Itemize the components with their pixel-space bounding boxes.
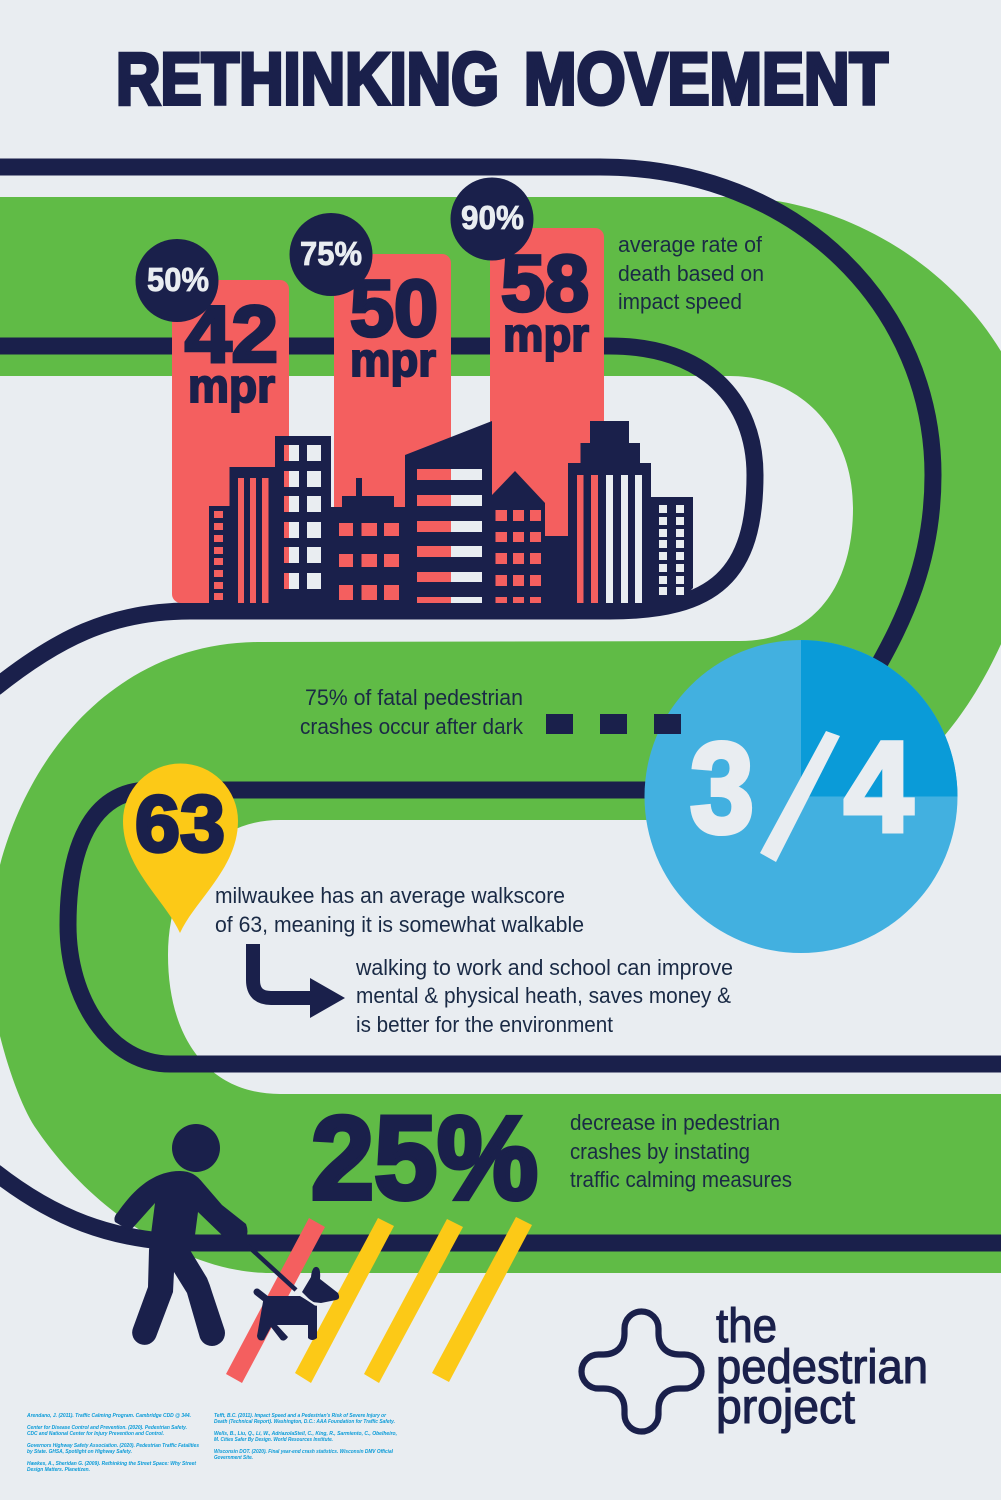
value: 50 mpr: 50 (350, 264, 438, 352)
text: milwaukee walkscore (215, 883, 584, 937)
bar: 50 mpr (334, 254, 451, 603)
text: benefits of walking: walking to work and school can improve (355, 955, 733, 980)
text: milwaukee walkscore: of 63, meaning it is somewhat walkable (215, 912, 584, 937)
title (116, 39, 888, 120)
text: traffic calming (570, 1110, 792, 1192)
green road ribbon (0, 197, 1001, 1273)
windows: building 2 (238, 478, 268, 603)
windows: building 8 (659, 505, 684, 595)
title: RETHINKING (116, 39, 499, 120)
value: 42 mpr: 42 (185, 290, 278, 378)
windows: building 5 (417, 469, 482, 603)
logo (582, 1300, 928, 1434)
navy road lines (0, 167, 1001, 1243)
value: 50 mpr: mpr (350, 333, 436, 386)
pie chart: three quarters (644, 640, 958, 953)
dashed connector (546, 714, 681, 734)
badge: 75% (290, 213, 372, 296)
bar: 58 mpr (490, 228, 604, 603)
badge: 50% (136, 239, 218, 322)
windows: building 4 (339, 523, 399, 600)
text: average rate of death (618, 232, 764, 314)
references: Death (Technical Report). Washington, D.C.: AAA Foundation for Traffic Safety. (214, 1419, 395, 1425)
references: Governors Highway Safety Association. (2020). Pedestrian Traffic Fatalities (27, 1443, 199, 1449)
references: Hawkes, A., Sheridan G. (2009). Rethinking the Street Space: Why Street (27, 1461, 196, 1467)
text: traffic calming: traffic calming measures (570, 1167, 792, 1192)
text: average rate of death: death based on (618, 261, 764, 286)
logo mark (582, 1312, 702, 1432)
person (114, 1124, 248, 1346)
references: Tefft, B.C. (2011). Impact Speed and a Pedestrian's Risk of Severe Injury or (214, 1413, 387, 1419)
references (26, 1413, 397, 1473)
bar chart: impact speed and death rate (136, 178, 604, 603)
text: milwaukee walkscore: milwaukee has an average walkscore (215, 883, 565, 908)
badge: 50%: 50% (147, 261, 209, 298)
badge: 90% (450, 178, 534, 260)
city skyline (209, 421, 693, 606)
dog (257, 1267, 339, 1341)
text: crashes after dark (300, 685, 524, 739)
references: Arendano, J. (2011). Traffic Calming Program. Cambridge CDD @ 344. (26, 1413, 191, 1419)
windows: building 3 (284, 445, 321, 589)
badge: 75%: 75% (300, 235, 362, 272)
text: crashes after dark: 75% of fatal pedestrian (305, 685, 523, 710)
fraction: 3/4 (690, 716, 913, 862)
text: benefits of walking: mental & physical heath, saves money & (356, 983, 731, 1008)
references: Wisconsin DOT. (2020). Final year-end crash statistics. Wisconsin DMV Official (214, 1449, 393, 1455)
icon: map pin with walkscore 63: 63 (135, 779, 225, 868)
text: average rate of death: impact speed (618, 289, 742, 314)
fraction: 3/4: 3 (690, 717, 754, 860)
text: benefits of walking (355, 955, 733, 1037)
fraction: 3/4: 4 (844, 716, 913, 859)
value: 42 mpr: mpr (188, 359, 275, 412)
text: crashes after dark: crashes occur after dark (300, 714, 524, 739)
logo wordmark: project (716, 1381, 855, 1434)
windows: building 6 (496, 510, 541, 603)
icon: map pin with walkscore 63 (123, 764, 238, 933)
references: Wells, B., Liu, Q., Li, W., AdriazolaSteil, C., King, R., Sarmiento, C., Obelheiro, (214, 1431, 397, 1437)
windows: building 1 (214, 511, 223, 600)
leash (248, 1246, 296, 1290)
logo wordmark: pedestrian (716, 1341, 928, 1394)
windows: building 7 (577, 475, 642, 603)
text: benefits of walking: is better for the environment (356, 1012, 613, 1037)
crosswalk stripes (226, 1217, 532, 1383)
references: Government Site. (214, 1455, 253, 1461)
references: Center for Disease Control and Prevention. (2020). Pedestrian Safety. (27, 1425, 187, 1431)
references: CDC and National Center for Injury Prevention and Control. (27, 1431, 164, 1437)
value: 58 mpr: mpr (503, 308, 589, 361)
text: average rate of death: average rate of (618, 232, 763, 257)
text: traffic calming: crashes by instating (570, 1139, 750, 1164)
title: MOVEMENT (524, 39, 888, 120)
logo wordmark: the (716, 1300, 777, 1353)
arrow (253, 944, 345, 1018)
references: M. Cities Safer By Design. World Resources Institute. (214, 1437, 333, 1443)
text: traffic calming: decrease in pedestrian (570, 1110, 780, 1135)
value: 58 mpr: 58 (501, 238, 589, 328)
bar: 42 mpr (172, 280, 289, 603)
icon: person walking dog (114, 1124, 339, 1346)
stat: 25%: 25% (311, 1092, 538, 1224)
badge: 90%: 90% (461, 199, 524, 236)
logo wordmark (716, 1300, 928, 1434)
references: Design Matters. Planetizen. (27, 1467, 90, 1473)
references: by State. GHSA, Spotlight on Highway Safety. (27, 1449, 132, 1455)
value: 42 mpr (185, 290, 278, 412)
